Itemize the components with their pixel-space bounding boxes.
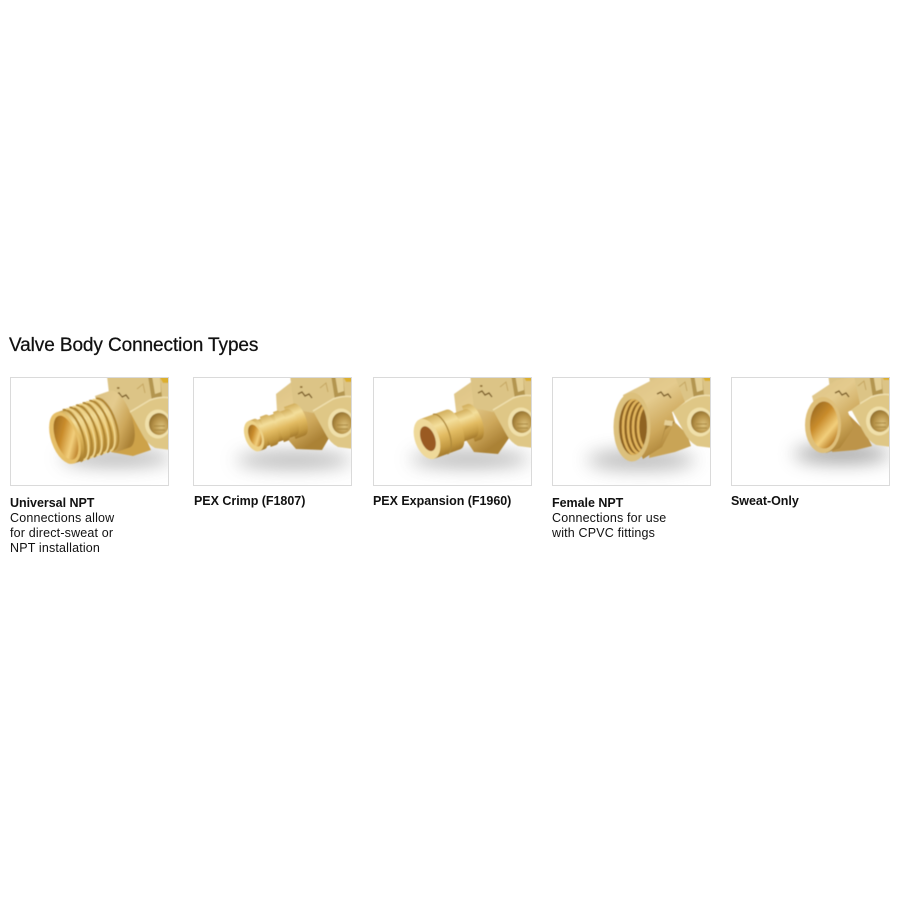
caption: Universal NPT: Connections allow [10,511,114,525]
caption: Universal NPT: NPT installation [10,541,100,555]
caption: Universal NPT [10,496,114,555]
caption: Sweat-Only: Sweat-Only [731,494,799,508]
caption: Female NPT: with CPVC fittings [552,526,655,540]
caption: Female NPT: Female NPT [552,496,623,510]
panel: Female NPT image [552,377,711,486]
caption: PEX Expansion: PEX Expansion (F1960) [373,494,511,508]
panel: Sweat-Only image [731,377,890,486]
caption: Female NPT: Connections for use [552,511,666,525]
caption: Female NPT [552,496,666,540]
caption: PEX Crimp: PEX Crimp (F1807) [194,494,305,508]
panel: Universal NPT image [10,377,169,486]
title: Valve Body Connection Types [9,335,258,356]
panel: PEX Crimp image [193,377,352,486]
caption: Universal NPT: Universal NPT [10,496,94,510]
panel: PEX Expansion image [373,377,532,486]
caption: Universal NPT: for direct-sweat or [10,526,113,540]
